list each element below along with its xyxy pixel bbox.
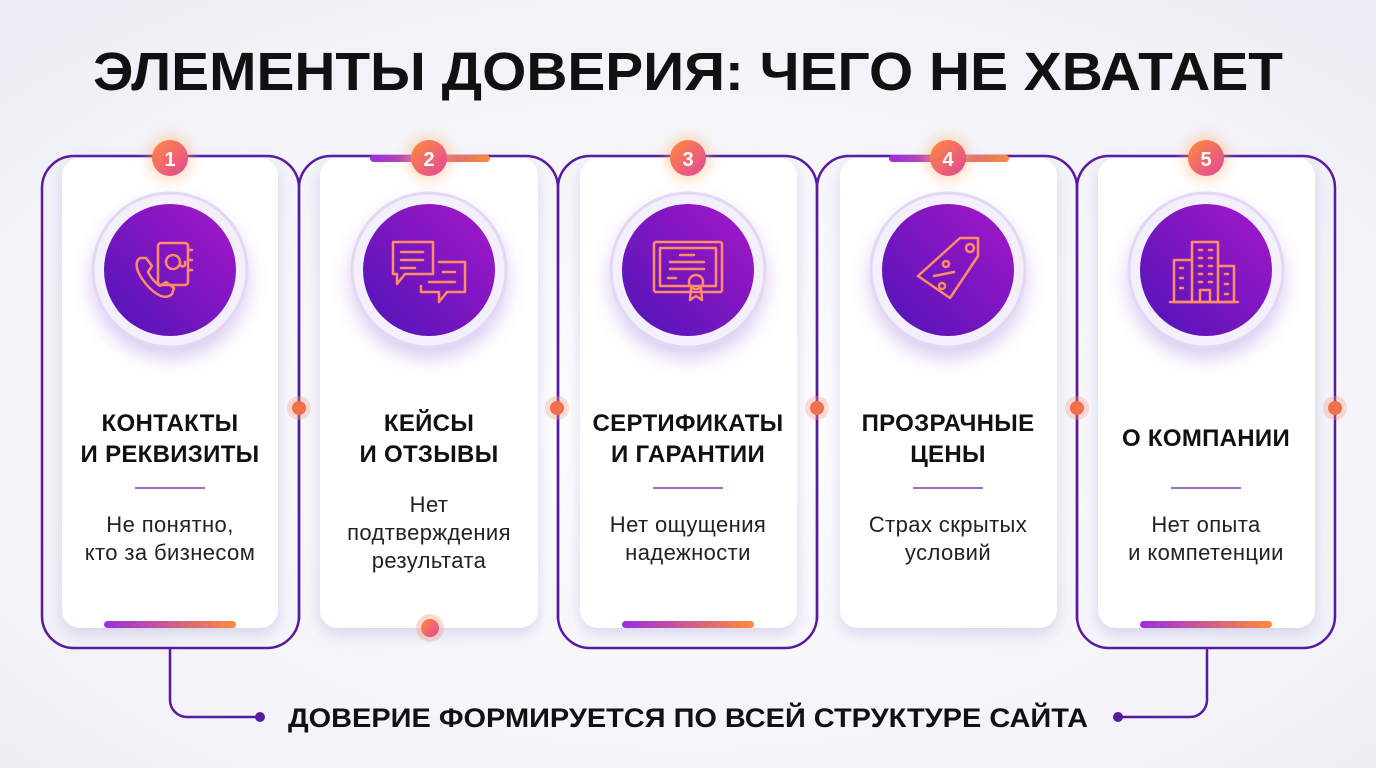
card 2: КЕЙСЫ [384,409,474,437]
card 2: подтверждения [347,520,511,545]
card 2: И ОТЗЫВЫ [359,441,499,468]
badge 3: 3 [682,149,694,171]
card 3: СЕРТИФИКАТЫ [593,410,783,437]
card 1: Не понятно, [106,512,234,537]
badge 5: 5 [1200,149,1212,171]
card 5: О КОМПАНИИ [1122,425,1290,452]
card 5: Нет опыта [1151,512,1261,537]
card 3: надежности [625,540,751,565]
connector dots [287,396,1347,420]
card 4: Страх скрытых [869,512,1027,537]
icon: chat [352,193,506,347]
card 4: ПРОЗРАЧНЫЕ [862,410,1034,437]
badge 5 [1182,134,1230,182]
card 5: и компетенции [1128,540,1284,565]
badge 2 [405,134,453,182]
icon: contacts [93,193,247,347]
card 5 [1098,134,1315,628]
card 3: И ГАРАНТИИ [611,441,765,468]
icon: building [1129,193,1283,347]
card 1: кто за бизнесом [85,540,255,565]
badge 1: 1 [164,149,176,171]
card 4 [840,134,1057,628]
card 3: Нет ощущения [610,512,766,537]
badge 3 [664,134,712,182]
card 1: И РЕКВИЗИТЫ [81,441,259,468]
badge 1 [146,134,194,182]
badge 2: 2 [423,149,435,171]
icon: price tag [871,193,1025,347]
card 2: Нет [410,492,448,517]
card 4: условий [905,540,991,565]
badge 4: 4 [942,149,954,171]
card 1 [62,134,278,628]
badge 4 [924,134,972,182]
card 2 [320,134,538,642]
icon: certificate [611,193,765,347]
card 3 [580,134,797,628]
connector frames [42,156,1335,717]
card 4: ЦЕНЫ [910,441,986,468]
card 1: КОНТАКТЫ [102,410,238,437]
card 2: результата [372,548,487,573]
footer statement: ДОВЕРИЕ ФОРМИРУЕТСЯ ПО ВСЕЙ СТРУКТУРЕ САЙТА [288,702,1088,733]
title: ЭЛЕМЕНТЫ ДОВЕРИЯ: ЧЕГО НЕ ХВАТАЕТ [93,42,1283,102]
